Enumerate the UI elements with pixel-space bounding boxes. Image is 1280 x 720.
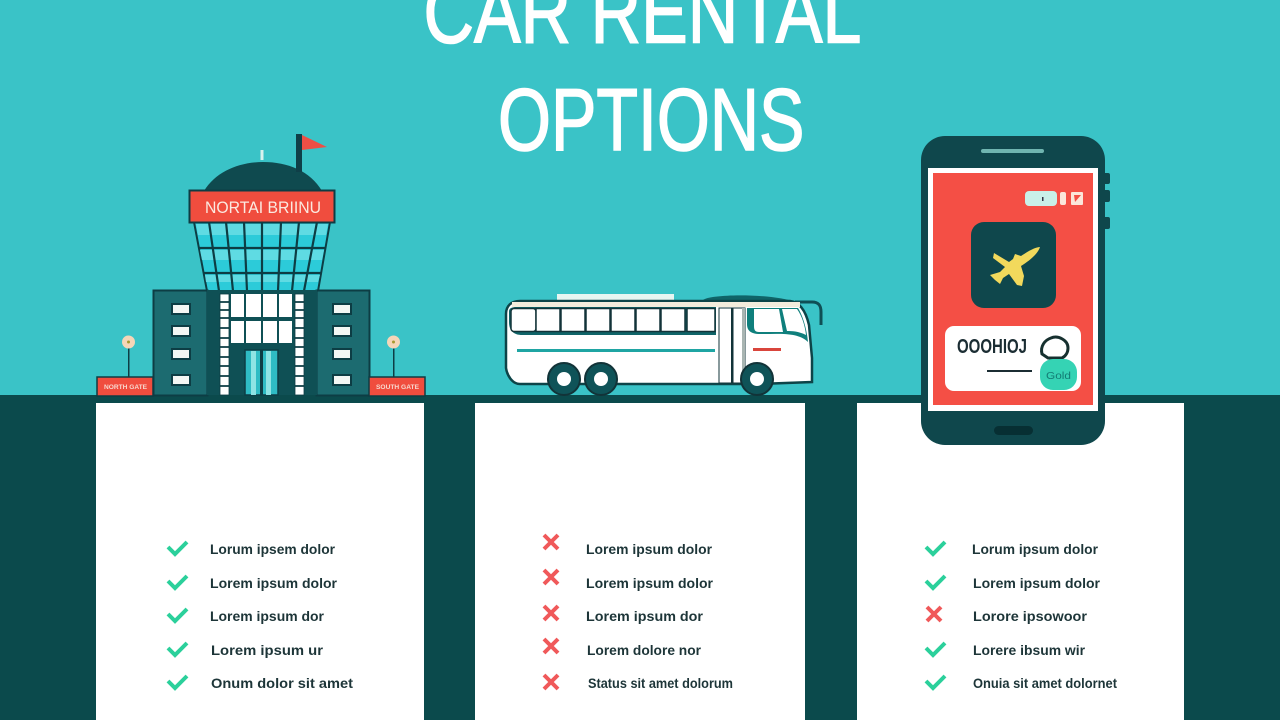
list labels: Lorem ipsum dor [210,608,325,624]
side buttons [1103,173,1110,229]
panel: app card [857,403,1184,720]
phone body [921,136,1105,445]
ticket card [945,326,1081,391]
list labels: Lorem ipsum dolor [586,575,714,591]
wheels [548,363,773,395]
app tile [971,222,1056,308]
flag [296,134,327,172]
roof stripe [512,302,800,307]
cab red label [753,348,781,351]
list labels: Onum dolor sit amet [211,675,353,691]
ticket card: OOOHIOJ [957,336,1027,358]
central block [207,290,317,395]
list labels: Lorem ipsum dolor [210,575,338,591]
list: app [926,541,1117,691]
list labels: Lorum ipsem dolor [210,541,336,557]
list labels: Onuia sit amet dolornet [973,675,1117,691]
roof unit [557,294,674,300]
icon: airport building [97,134,425,396]
speaker [981,149,1044,153]
list labels: Lorem ipsum dolor [586,541,713,557]
left wing [154,290,208,396]
panel: bus card [475,403,805,720]
home button [994,426,1033,435]
title: OPTIONS [498,71,804,169]
list marks [926,542,945,688]
list labels [586,541,733,691]
bus body [506,301,812,384]
glass tower [194,222,330,291]
list labels [972,541,1117,691]
list labels: Lorere ibsum wir [973,642,1086,658]
list labels: Lorem dolore nor [587,642,702,658]
list: bus [544,535,733,691]
dome [204,162,322,191]
list labels: Lorore ipsowoor [973,608,1088,624]
cross mark [927,607,941,621]
right wing [316,290,370,396]
right planter sign: SOUTH GATE [376,385,419,391]
left lamp [122,336,135,377]
list marks [168,542,187,688]
airport sign [190,190,334,222]
passenger windows [511,308,715,332]
list marks [544,535,558,689]
dark ground band [0,395,1280,720]
list labels [210,541,353,691]
wing windows [172,304,351,385]
icon: bus [506,294,821,395]
entrance doors [230,349,293,395]
left planter sign [97,377,153,396]
left planter sign: NORTH GATE [104,385,147,391]
list: airport [168,541,353,691]
list labels: Lorum ipsum dolor [972,541,1099,557]
icon: money bag: Gold [1046,371,1071,382]
central windows [231,294,292,343]
side columns [220,294,304,395]
icon: airplane [990,247,1040,286]
list labels: Lorem ipsum dolor [973,575,1101,591]
right planter sign [369,377,425,396]
airport sign: NORTAI BRIINU [205,198,321,217]
list labels: Lorem ipsum ur [211,642,324,658]
screen [928,168,1098,411]
panel: airport card [96,403,424,720]
list labels: Lorem ipsum dor [586,608,704,624]
side stripe [517,349,715,352]
mirror [795,302,821,325]
window band [509,307,716,335]
right lamp [387,336,400,377]
background [0,0,1280,395]
list labels: Status sit amet dolorum [588,675,733,691]
title [424,0,861,169]
door [719,308,745,383]
status bar [1025,191,1083,206]
cab window [747,308,808,342]
icon: phone [921,136,1110,445]
